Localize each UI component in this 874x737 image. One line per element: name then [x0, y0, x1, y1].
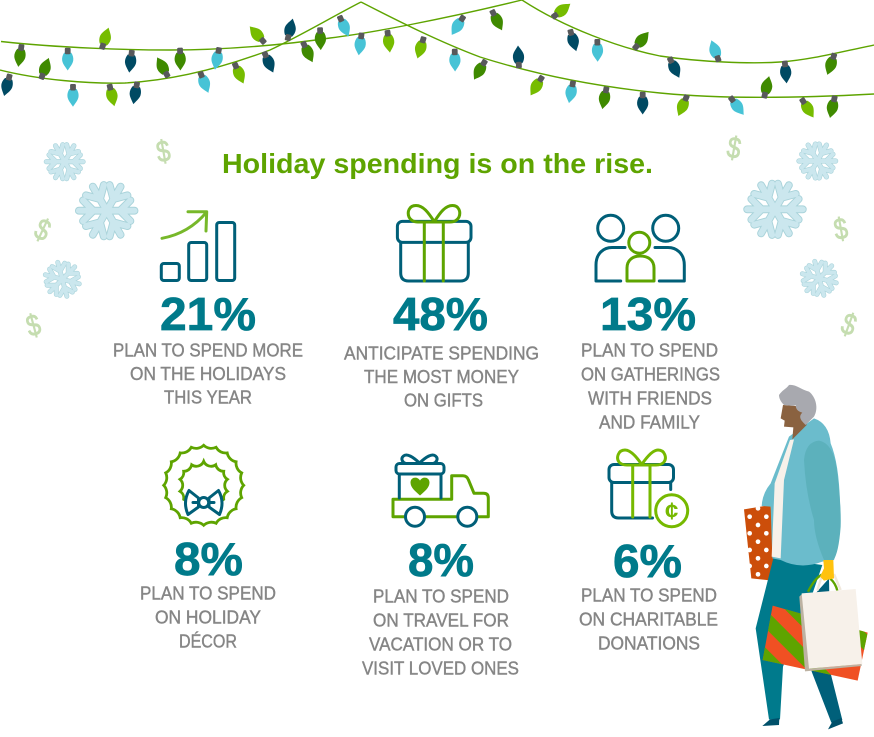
description: VISIT LOVED ONES [362, 658, 519, 678]
illustration: woman with shopping bags [744, 385, 874, 729]
icon: gift box [397, 206, 471, 281]
description: VACATION OR TO [369, 634, 512, 654]
dollar signs [23, 131, 861, 344]
icon: truck with gift [393, 455, 488, 526]
description: ON GIFTS [404, 390, 483, 410]
description [113, 340, 303, 408]
snowflakes left [41, 142, 135, 302]
description: ANTICIPATE SPENDING [344, 342, 539, 364]
string lights garland [0, 0, 874, 121]
stat 8%: 8% [408, 534, 474, 586]
cream bag [799, 589, 862, 671]
panel: decor [140, 445, 276, 652]
description: THIS YEAR [164, 386, 252, 408]
stat 8%: 8% [174, 533, 243, 585]
description: PLAN TO SPEND [140, 582, 276, 604]
panel: gatherings [581, 215, 720, 432]
icon: rising bars [161, 212, 235, 280]
description [362, 586, 519, 678]
polka dot bag [744, 505, 776, 581]
description: PLAN TO SPEND [581, 584, 717, 606]
title: Holiday spending is on the rise. [222, 148, 653, 179]
dollar signs: $ [23, 308, 45, 344]
stat 21%: 21% [160, 288, 256, 340]
description [344, 342, 539, 410]
description [581, 340, 720, 432]
legs [756, 558, 843, 729]
description: PLAN TO SPEND MORE [113, 340, 303, 360]
hand [820, 560, 834, 581]
description: ON GATHERINGS [581, 364, 720, 384]
description: DÉCOR [179, 630, 237, 652]
icon: gift with coin: ¢ [665, 498, 678, 525]
description: DONATIONS [598, 632, 700, 654]
panel: gifts [344, 206, 539, 410]
description: ON HOLIDAY [155, 606, 261, 628]
stat 48%: 48% [393, 288, 488, 340]
head and hair [779, 385, 816, 439]
stat 6%: 6% [613, 535, 682, 587]
dollar signs: $ [831, 212, 851, 247]
description [140, 582, 276, 652]
dollar signs: $ [29, 213, 56, 248]
panel: donations [579, 450, 718, 654]
icon: family [596, 215, 684, 281]
description: ON CHARITABLE [579, 608, 718, 630]
dollar signs: $ [154, 135, 173, 169]
description: THE MOST MONEY [364, 366, 519, 387]
dollar signs: $ [724, 131, 744, 166]
description: ON TRAVEL FOR [373, 610, 509, 630]
snowflakes right [747, 142, 841, 301]
stat 13%: 13% [600, 288, 696, 340]
description: ON THE HOLIDAYS [130, 363, 286, 384]
description: PLAN TO SPEND [581, 340, 718, 360]
panel: spend more [113, 212, 303, 408]
dollar signs: $ [837, 307, 861, 343]
description: WITH FRIENDS [588, 388, 712, 408]
striped bag [762, 606, 868, 681]
description [579, 584, 718, 654]
description: PLAN TO SPEND [373, 586, 509, 606]
jacket [762, 418, 841, 565]
panel: travel [362, 455, 519, 678]
icon: wreath [164, 445, 244, 525]
icon: gift with coin [609, 450, 688, 527]
bag handles [808, 574, 841, 592]
description: AND FAMILY [599, 412, 700, 432]
